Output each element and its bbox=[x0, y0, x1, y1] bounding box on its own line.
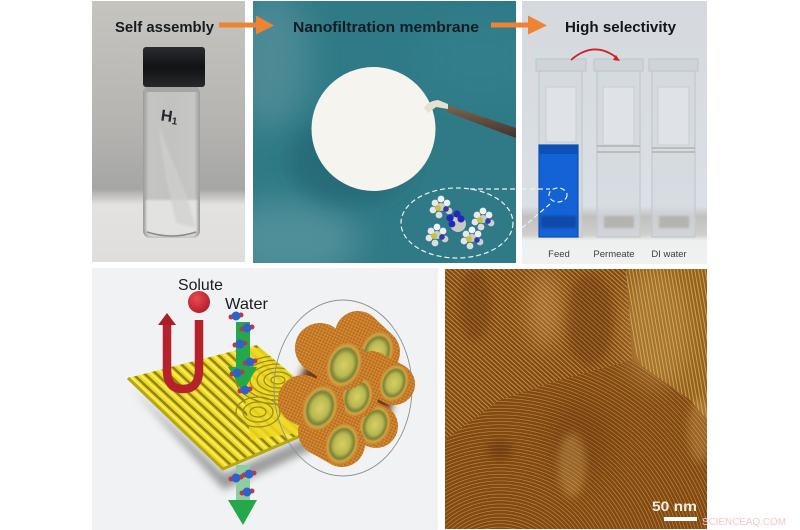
vial label H1: H bbox=[160, 108, 173, 126]
cylinder: lower right bbox=[352, 401, 396, 449]
scale bar bbox=[664, 517, 697, 521]
green arrow: bottom bbox=[228, 465, 257, 525]
molecule in dashed ellipse bbox=[401, 188, 516, 258]
AFM stripe domains bbox=[445, 269, 707, 529]
tweezers bbox=[424, 100, 516, 138]
heading: high selectivity: High selectivity bbox=[565, 19, 677, 36]
AFM height variation bbox=[459, 269, 712, 497]
heading: nanofiltration membrane: Nanofiltration membrane bbox=[293, 19, 479, 36]
vial bbox=[143, 47, 205, 238]
water molecules bbox=[228, 312, 258, 496]
magnified cylinders outline bbox=[274, 300, 412, 476]
scale label: 50 nm bbox=[652, 498, 697, 514]
panel: high selectivity photo bbox=[522, 1, 707, 264]
green arrow: top bbox=[228, 322, 257, 392]
panel: self assembly photo bbox=[92, 1, 245, 262]
vial cap bbox=[143, 47, 205, 87]
arrow: self assembly to membrane bbox=[219, 16, 274, 34]
solute ball bbox=[188, 291, 210, 313]
red transfer arrow bbox=[571, 49, 620, 61]
cylinder: back top bbox=[355, 327, 399, 377]
arrow: membrane to selectivity bbox=[491, 16, 547, 34]
cuvette: permeate bbox=[594, 59, 643, 237]
panel: membrane schematic bbox=[92, 268, 438, 530]
label: DI water: DI water bbox=[651, 249, 687, 260]
membrane shadow bbox=[140, 396, 313, 493]
label: permeate: Permeate bbox=[593, 249, 635, 260]
cylinder: back right bbox=[372, 360, 414, 406]
cylinder: bottom bbox=[320, 419, 364, 469]
label: water: Water bbox=[225, 296, 269, 313]
white membrane disc bbox=[312, 67, 436, 191]
cuvette: DI water bbox=[649, 59, 698, 237]
cylinder: left bbox=[296, 381, 344, 435]
vial label H1: 1 bbox=[171, 116, 178, 128]
watermark: SCIENCEAQ.COM bbox=[702, 517, 786, 528]
cylinder: centre bbox=[335, 373, 378, 421]
cylinder: upper left bbox=[320, 338, 368, 392]
label: feed: Feed bbox=[548, 249, 570, 260]
yellow membrane bbox=[127, 345, 299, 471]
panel: nanofiltration membrane photo bbox=[253, 1, 516, 263]
solute U-turn arrow bbox=[158, 313, 199, 389]
hexagonal cylinders bbox=[296, 327, 414, 469]
cuvette: feed bbox=[536, 59, 586, 237]
panel: AFM image bbox=[445, 269, 712, 529]
dashed callout on blue cuvette bbox=[522, 188, 567, 228]
heading: self assembly: Self assembly bbox=[115, 19, 215, 36]
label: solute: Solute bbox=[178, 277, 223, 294]
